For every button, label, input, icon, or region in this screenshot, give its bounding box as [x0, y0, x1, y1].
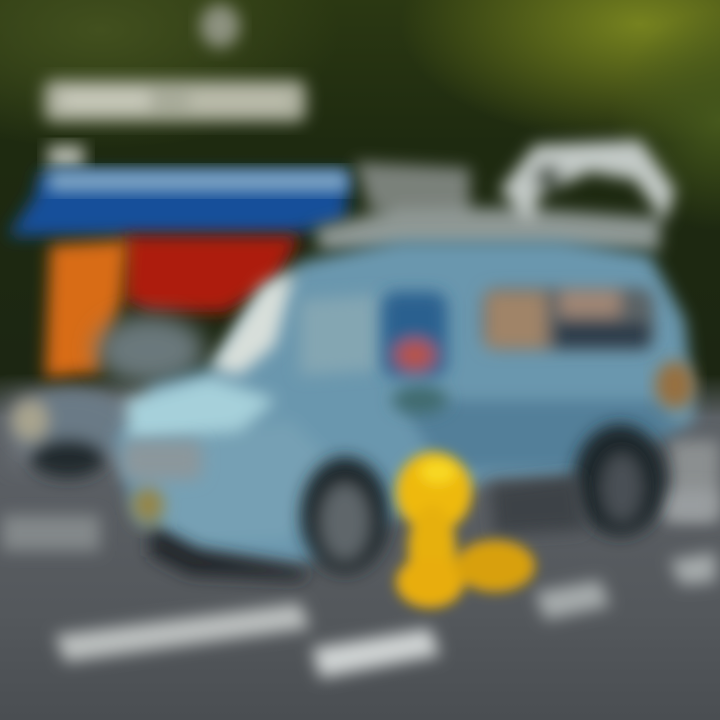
van: rear wheel [574, 424, 666, 536]
road markings [2, 490, 716, 678]
van: front wheel [301, 457, 389, 573]
van: tail light [655, 361, 695, 409]
icon: yellow duck [396, 452, 535, 608]
van: body [115, 240, 695, 565]
sign: blurred heading text bar [44, 80, 306, 122]
van: windshield [210, 270, 295, 375]
banner: red panel [125, 236, 300, 312]
van: roof rack and cargo [315, 140, 675, 250]
sign: small white strip [48, 145, 84, 169]
background: pavement behind vehicles [12, 395, 720, 520]
van: underside shadow [490, 475, 585, 535]
van: rear window [482, 288, 654, 350]
banner: lower shade [95, 315, 205, 385]
banner: blue stripe [8, 170, 350, 236]
sign: top white blob [200, 4, 240, 48]
banner: orange panel [45, 240, 128, 378]
van: side window front [300, 295, 380, 375]
van: middle window with figure [382, 292, 448, 414]
van: front grille and bumper [122, 440, 310, 580]
van [115, 140, 695, 580]
background car at left [10, 390, 134, 478]
